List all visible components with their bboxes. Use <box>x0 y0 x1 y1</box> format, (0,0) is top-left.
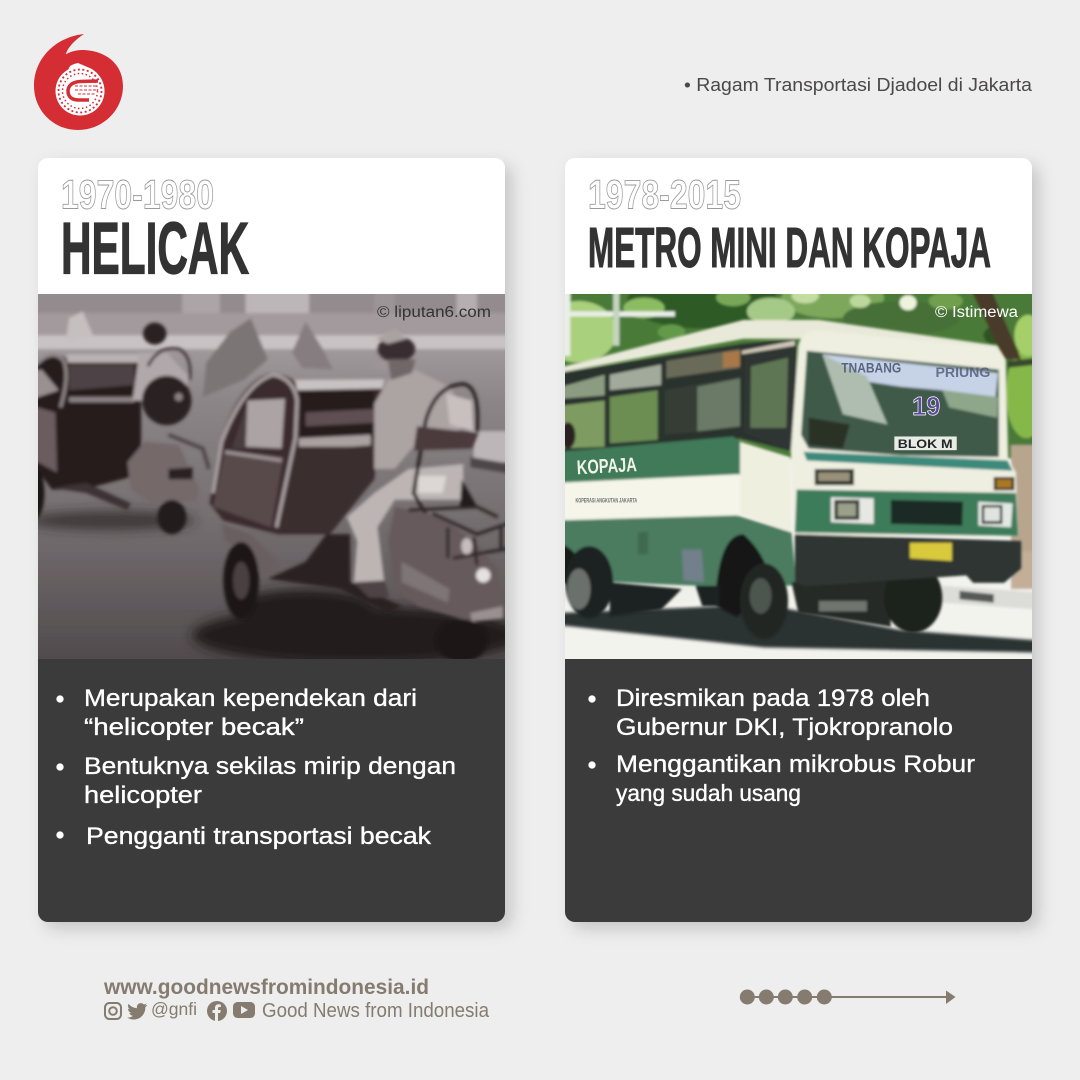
social handle: @gnfi <box>151 999 197 1019</box>
bullet list: Pengganti transportasi becak <box>86 823 432 850</box>
panel: helicak <box>24 158 522 922</box>
bullet list: helicopter <box>84 782 202 809</box>
icon: youtube <box>233 1002 255 1018</box>
painted lettering on bus: 19 <box>912 391 940 421</box>
website: www.goodnewsfromindonesia.id <box>103 975 429 999</box>
panel: metro mini dan kopaja <box>541 158 1047 922</box>
photo credit: © liputan6.com <box>377 304 491 321</box>
bullet list: Menggantikan mikrobus Robur <box>616 751 975 778</box>
bullet list: “helicopter becak” <box>84 714 304 741</box>
bullet list <box>56 685 456 850</box>
bullet list: Gubernur DKI, Tjokropranolo <box>616 714 953 741</box>
brand name: Good News from Indonesia <box>262 1000 490 1022</box>
icon: instagram <box>105 1003 121 1019</box>
card background <box>38 158 505 922</box>
bullet list: Diresmikan pada 1978 oleh <box>616 685 930 712</box>
bullet list: Bentuknya sekilas mirip dengan <box>84 753 456 780</box>
left vehicle <box>31 354 141 490</box>
heading: HELICAK <box>61 208 249 290</box>
painted lettering on bus: TNABANG <box>841 360 901 375</box>
year range: 1978-2015 <box>588 172 741 218</box>
painted lettering on bus: BLOK M <box>898 437 953 451</box>
dark text area <box>38 659 505 922</box>
bus side <box>558 339 797 455</box>
card background <box>565 158 1032 922</box>
underbody and right wheel sit behind the bumper <box>791 579 891 627</box>
bus front <box>791 330 1018 536</box>
bullet list: Merupakan kependekan dari <box>84 685 417 712</box>
painted lettering on bus: KOPERASI ANGKUTAN JAKARTA <box>575 498 637 505</box>
logo <box>34 34 123 130</box>
painted lettering on bus <box>575 360 990 505</box>
photo credit: © Istimewa <box>935 304 1018 321</box>
arrow: page progress <box>740 990 956 1004</box>
dark text area <box>565 659 1032 922</box>
painted lettering on bus: KOPAJA <box>576 454 637 479</box>
painted lettering on bus: PRIUNG <box>935 365 990 380</box>
icon: twitter <box>127 1003 147 1020</box>
photo: kopaja bus <box>565 294 1032 659</box>
header topic label: • Ragam Transportasi Djadoel di Jakarta <box>684 74 1033 95</box>
icon: facebook <box>207 1001 227 1021</box>
bus roof <box>558 320 1006 373</box>
photo: helicak vehicles <box>38 294 505 659</box>
year range: 1970-1980 <box>61 172 214 218</box>
footer: website and social <box>103 975 490 1022</box>
bullet list <box>588 685 975 806</box>
right vehicle <box>210 373 384 534</box>
bullet list: yang sudah usang <box>616 780 801 806</box>
